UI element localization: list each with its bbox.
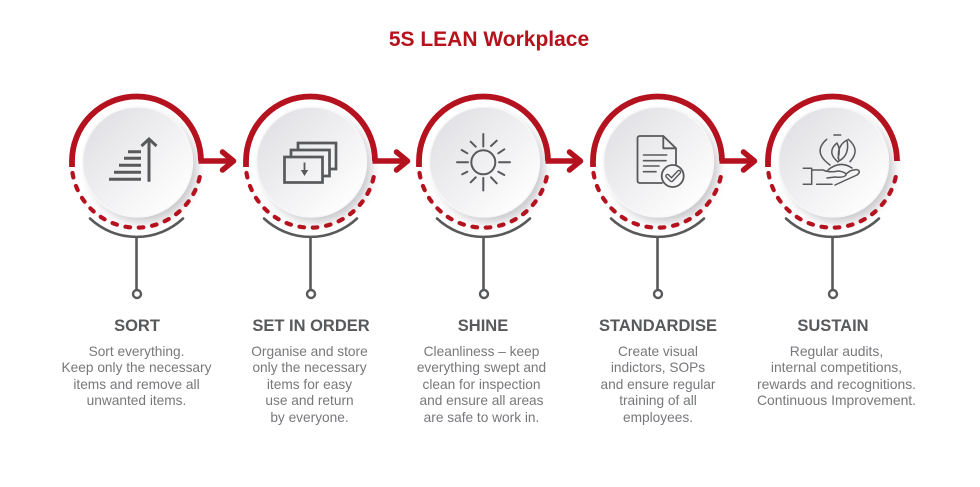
text: set in order: only the necessary (252, 360, 367, 375)
icon: hand holding plant (803, 135, 859, 185)
text: sort: unwanted items. (87, 393, 186, 408)
icon: document with check badge (638, 136, 684, 187)
arrow 4 (720, 152, 754, 170)
text: standardise: Create visual (618, 344, 698, 359)
text: sort: items and remove all (73, 377, 200, 392)
arrow 2 (372, 152, 408, 170)
icon: sun (457, 134, 510, 190)
text: sort: Sort everything. (89, 344, 184, 359)
arrow 3 (546, 152, 580, 170)
text: shine: clean for inspection (423, 377, 540, 392)
text: sustain: Continuous Improvement. (757, 392, 916, 408)
text: shine: Cleanliness – keep (424, 344, 539, 359)
text: sustain: rewards and recognitions. (757, 376, 916, 392)
step 5: sustain circle (768, 96, 897, 298)
text: shine: everything swept and (417, 360, 546, 375)
step 2: set in order circle (246, 96, 375, 298)
text: sort (62, 344, 212, 408)
text: standardise: training of all (619, 393, 697, 408)
step 3: shine circle (419, 96, 548, 298)
icon: stacked frames with down arrow (284, 143, 336, 182)
text: standardise: employees. (623, 410, 693, 425)
text: sustain: Regular audits, (790, 343, 883, 359)
heading: shine: SHINE (458, 317, 508, 335)
heading: set in order: SET IN ORDER (252, 317, 370, 335)
heading: sustain: SUSTAIN (797, 317, 869, 335)
text: set in order: items for easy (267, 377, 352, 392)
step 4: standardise circle (593, 96, 722, 298)
heading: sort: SORT (114, 317, 160, 335)
text: set in order (251, 344, 368, 425)
text: shine (417, 344, 546, 425)
text: sustain: internal competitions, (771, 359, 902, 375)
text: standardise: indictors, SOPs (611, 360, 705, 375)
text: sustain (757, 343, 916, 408)
text: set in order: Organise and store (251, 344, 368, 359)
icon: stairs with up arrow (109, 139, 156, 182)
heading: standardise: STANDARDISE (599, 317, 717, 335)
text: standardise: and ensure regular (601, 377, 715, 392)
text: set in order: by everyone. (270, 410, 349, 425)
text: shine: and ensure all areas (419, 393, 544, 408)
arrow 1 (198, 152, 234, 170)
title: 5S LEAN Workplace (389, 28, 589, 51)
text: sort: Keep only the necessary (62, 360, 211, 375)
step 1: sort circle (72, 96, 201, 298)
text: shine: are safe to work in. (424, 410, 539, 425)
text: standardise (601, 344, 716, 425)
text: set in order: use and return (265, 393, 354, 408)
